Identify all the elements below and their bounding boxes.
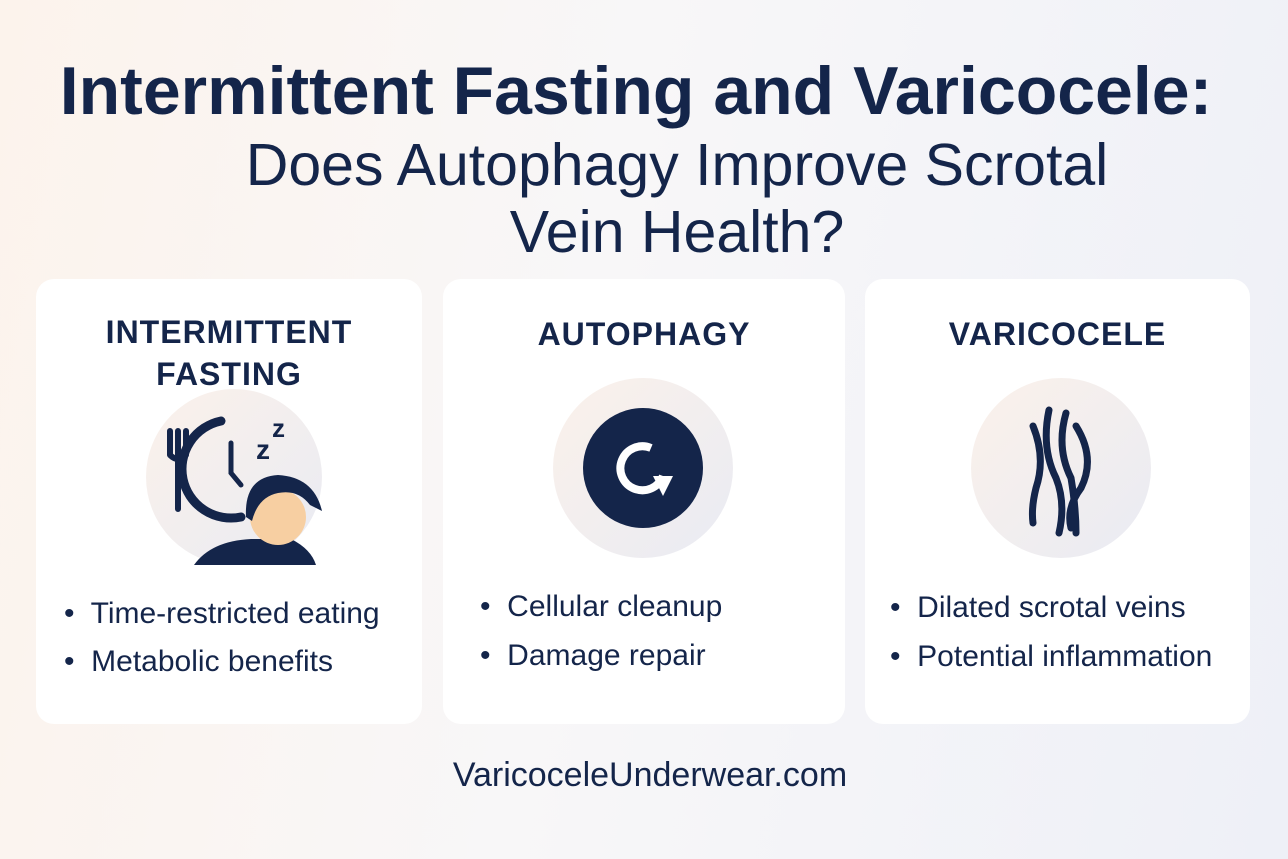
panel: intermittent fasting (36, 279, 422, 724)
icon: fork clock sleeping face (146, 389, 322, 565)
subtitle (246, 132, 1108, 265)
bullets: • Cellular cleanup (480, 590, 722, 623)
panel: autophagy (443, 279, 845, 724)
panel: varicocele (865, 279, 1250, 724)
bullets (890, 591, 1212, 673)
subtitle: Vein Health? (510, 199, 844, 265)
icon: fork clock sleeping face: z (256, 434, 270, 465)
subtitle: Does Autophagy Improve Scrotal (246, 132, 1108, 198)
bullets (64, 597, 380, 678)
icon: fork clock sleeping face: z (272, 413, 285, 443)
heading: AUTOPHAGY (538, 316, 750, 352)
heading: FASTING (156, 356, 302, 392)
title: Intermittent Fasting and Varicocele: (60, 53, 1212, 129)
icon: veins (971, 378, 1151, 558)
footer: VaricoceleUnderwear.com (453, 756, 847, 794)
bullets: • Time-restricted eating (64, 597, 380, 630)
heading (106, 314, 352, 392)
bullets (480, 590, 722, 672)
bullets: • Damage repair (480, 639, 706, 672)
bullets: • Dilated scrotal veins (890, 591, 1186, 624)
icon: cycle (553, 378, 733, 558)
bullets: • Potential inflammation (890, 640, 1212, 673)
heading: INTERMITTENT (106, 314, 352, 350)
bullets: • Metabolic benefits (64, 645, 333, 678)
heading: VARICOCELE (949, 316, 1166, 352)
